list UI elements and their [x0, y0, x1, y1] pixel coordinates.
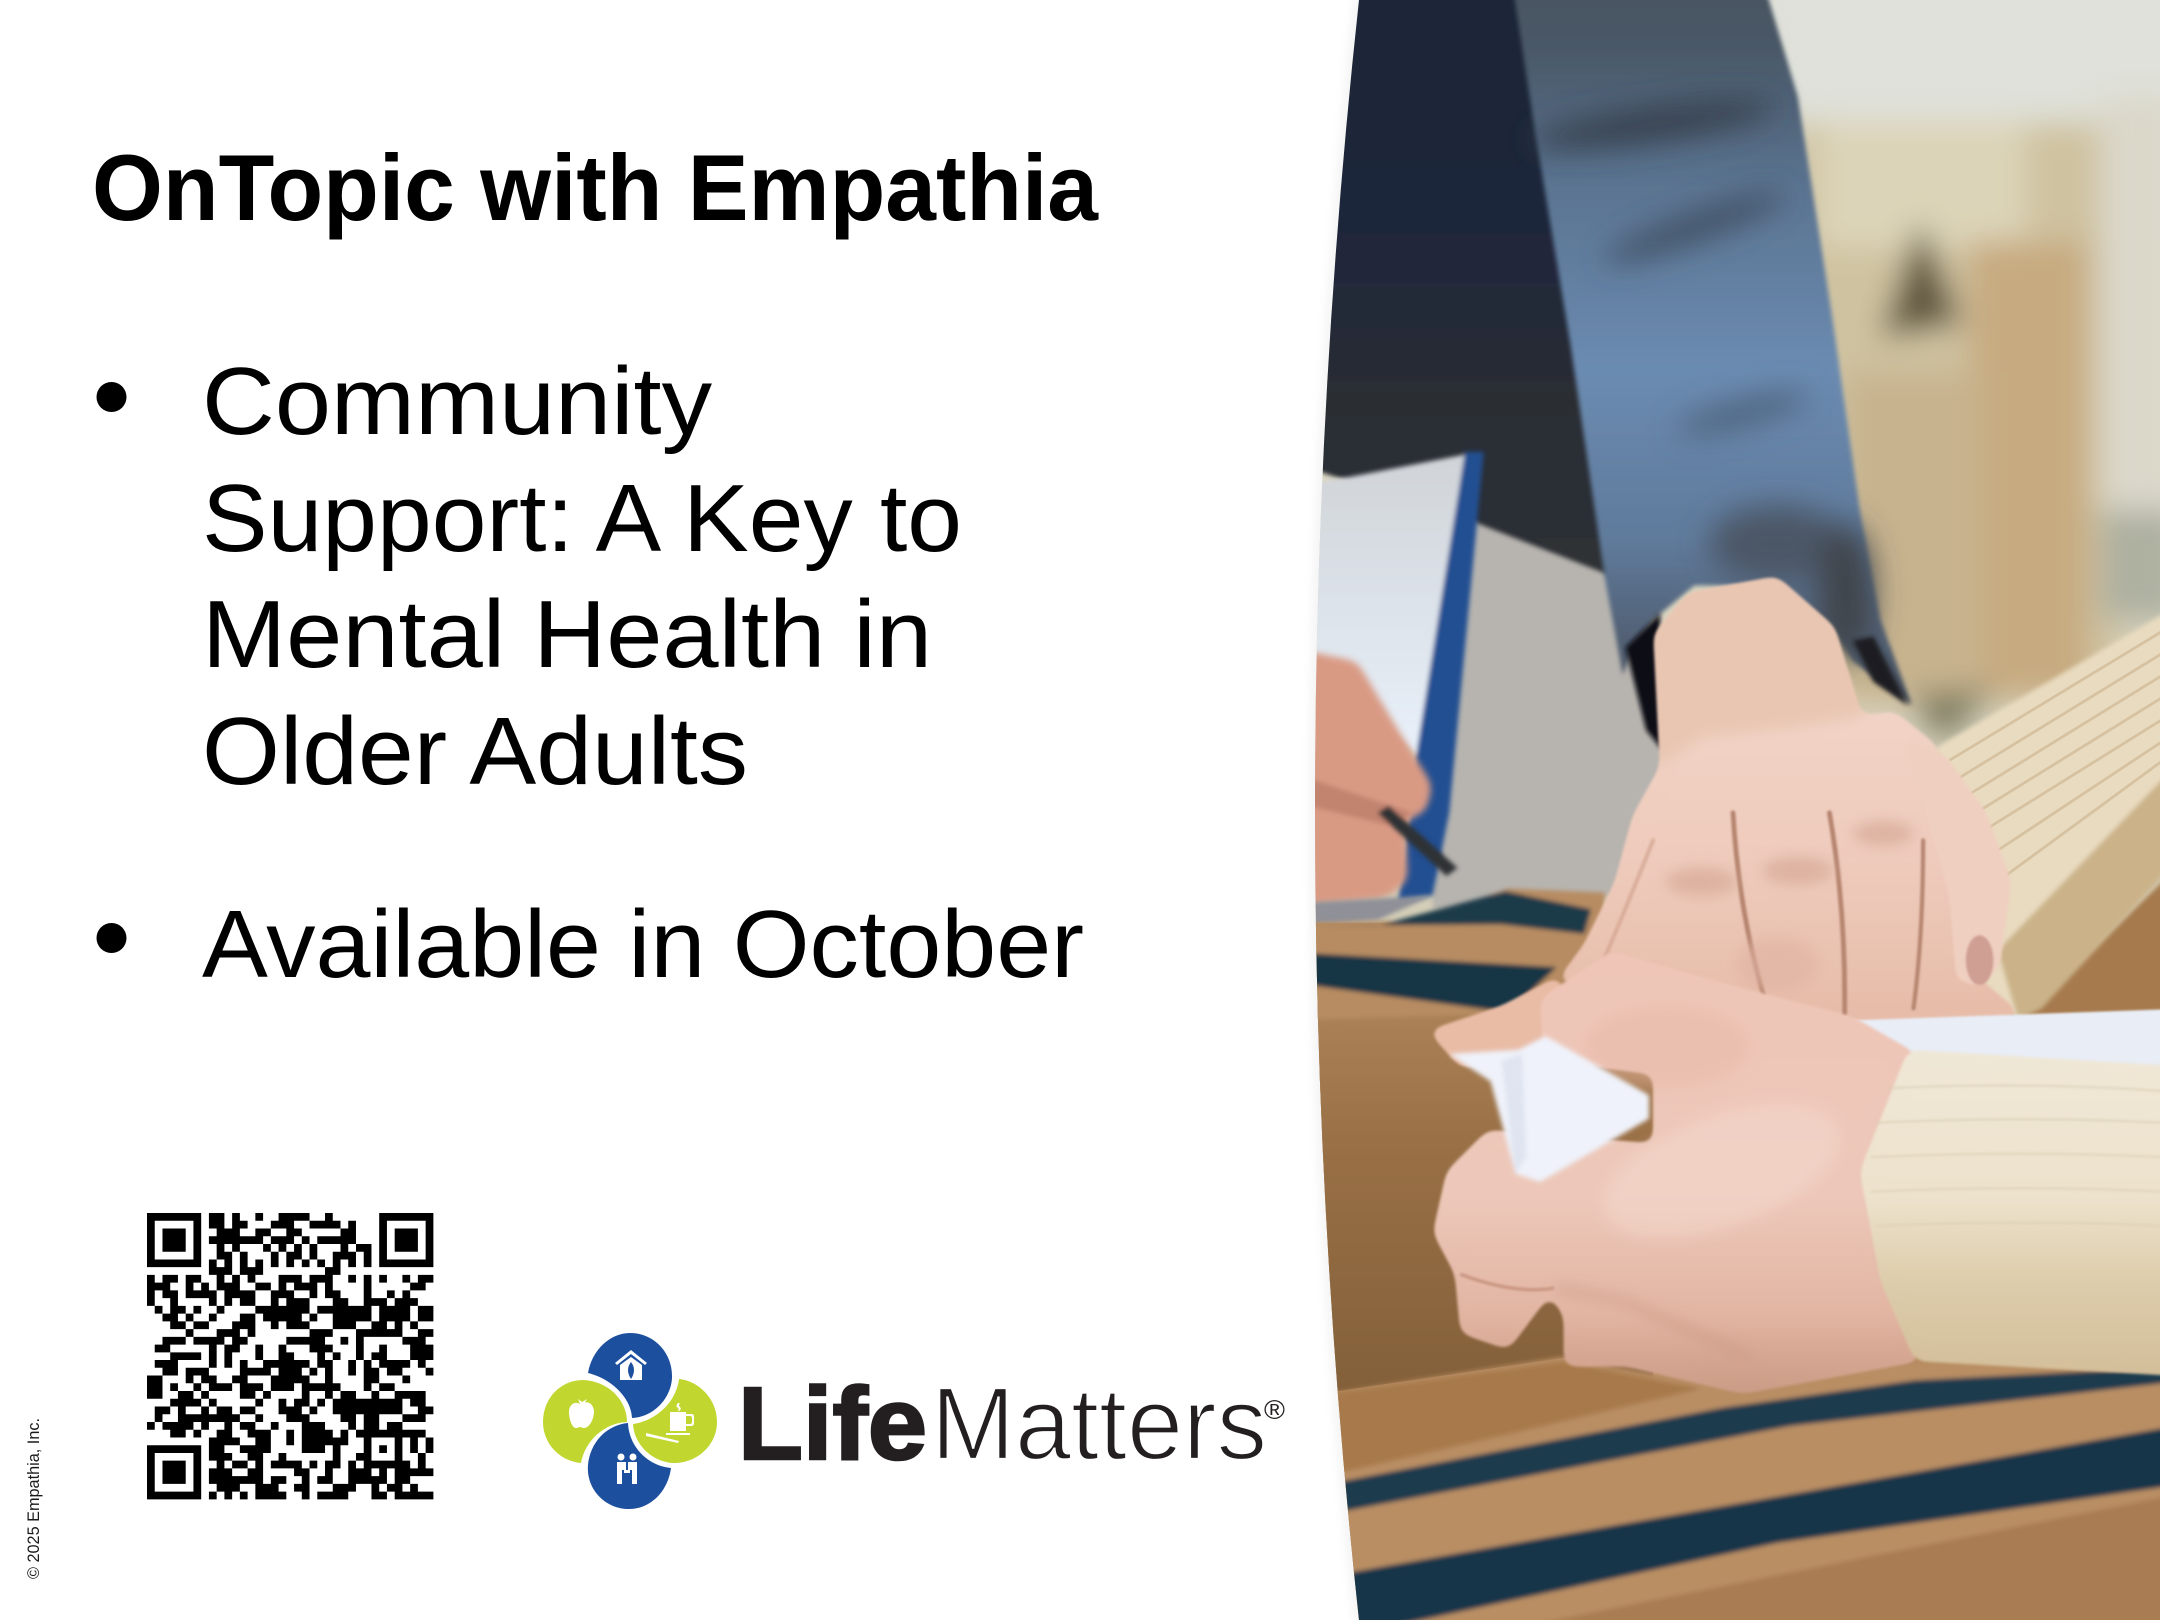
wordmark: Matters	[931, 1366, 1267, 1481]
woman's wrist and hand	[1557, 576, 2025, 1026]
wordmark: ®	[1264, 1395, 1285, 1425]
icon: family	[617, 1454, 637, 1484]
icon: house with plant	[615, 1350, 647, 1380]
bullet: topic title: Community	[202, 348, 712, 455]
cream sweater cuff	[1860, 1050, 2160, 1378]
bullet list: topic and availability	[96, 348, 1084, 998]
sleeve cuff shadow	[1626, 613, 1663, 751]
upper sweater sleeve	[1937, 614, 2160, 1016]
tissue	[1449, 1036, 1649, 1182]
icon: apple	[569, 1399, 594, 1428]
pinky finger	[1942, 756, 2010, 984]
lower lap fold and stripes	[1322, 1357, 2160, 1620]
photo: two people holding hands	[1295, 0, 2160, 1620]
jacket	[1309, 0, 1619, 579]
wordmark: Life	[738, 1366, 927, 1481]
sleeve	[1508, 0, 1912, 705]
bullet: availability: Available in October	[202, 891, 1084, 998]
blurred room	[1802, 113, 2160, 747]
wordmark	[738, 1366, 1285, 1481]
couch	[1433, 510, 1674, 909]
icon: coffee cup and pencil	[646, 1403, 694, 1443]
title: OnTopic with Empathia	[92, 135, 1099, 240]
copyright: © 2025 Empathia, Inc.	[24, 1418, 43, 1579]
lap	[1295, 923, 2066, 1620]
writing hand with pen	[1302, 650, 1433, 906]
QR code	[143, 1209, 437, 1503]
older hand	[1433, 951, 1922, 1394]
finger tip at left	[1433, 979, 1562, 1068]
bullet: topic title	[96, 348, 962, 805]
LifeMatters logo	[543, 1333, 1285, 1509]
bullet: topic title: Older Adults	[202, 698, 748, 805]
white tissue band	[1856, 1008, 2160, 1067]
bullet: topic title: Support: A Key to	[202, 465, 962, 572]
icon: pinwheel emblem	[543, 1333, 717, 1509]
clipboard	[1309, 452, 1484, 902]
bullet: topic title: Mental Health in	[202, 581, 932, 688]
